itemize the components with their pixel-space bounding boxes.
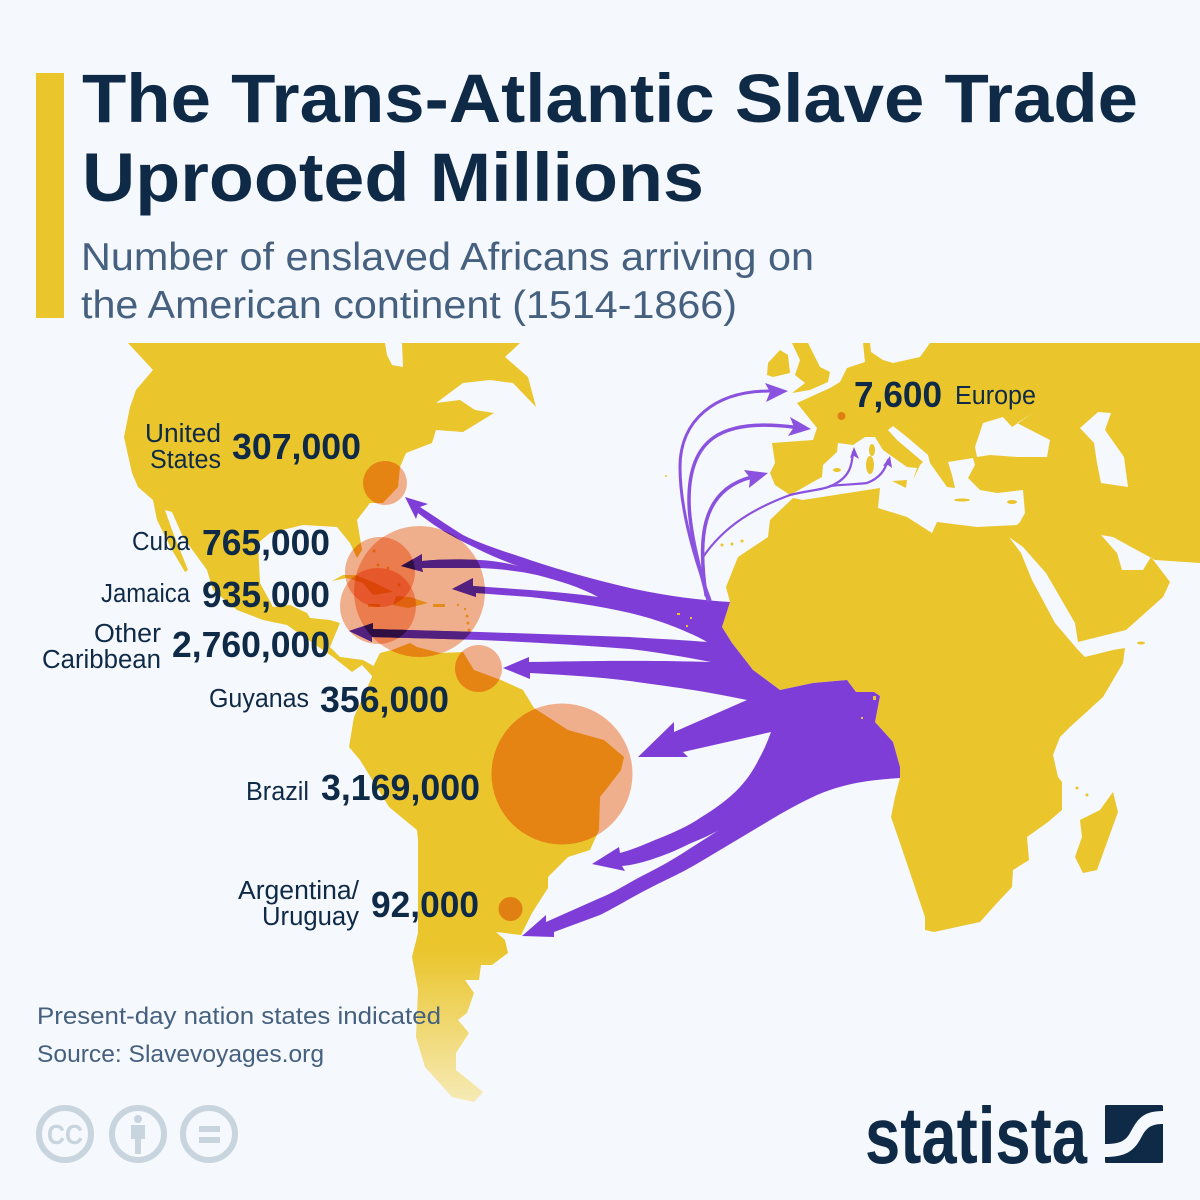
arrow: to Iberia [702,477,752,595]
arrow: to Mediterranean [703,452,853,557]
map: North and Central America [124,343,536,677]
label: Argentina/Uruguay: 92,000 [371,884,479,925]
label: Argentina/Uruguay [238,877,479,931]
icon: attribution [112,1108,164,1160]
label: Europe: Europe [955,382,1036,410]
title [82,60,1138,216]
map: South America [349,643,624,1102]
title accent bar [36,73,64,318]
bubble: Argentina/Uruguay [498,897,522,921]
arrow heads [744,383,892,488]
label: Guyanas: 356,000 [320,679,449,720]
label: Brazil: Brazil [246,778,309,806]
label: Europe [854,374,1036,415]
bubble: Other Caribbean [354,526,485,657]
icon: no derivatives [183,1108,235,1160]
specks of Cape Verde over the flow [677,613,876,719]
land tint under bubbles [353,468,624,835]
label: United States [145,420,361,474]
slave trade flow arrows [349,497,900,937]
label: Other Caribbean [42,620,330,674]
title: Uprooted Millions [82,139,704,216]
footer notes: Source: Slavevoyages.org [37,1041,324,1068]
label: Jamaica: Jamaica [101,580,191,608]
label: Cuba [132,522,330,563]
label: Brazil: 3,169,000 [321,767,480,808]
label: Europe: 7,600 [854,374,942,415]
subtitle: Number of enslaved Africans arriving on [81,236,814,279]
icon: cc: CC [47,1119,83,1150]
icon: statista mark [1105,1105,1163,1163]
map: islands [332,343,1145,873]
title: The Trans-Atlantic Slave Trade [82,60,1138,137]
footer notes [37,1003,441,1068]
bubble: United States [363,461,407,505]
icon: creative commons licence [39,1108,235,1160]
label: Argentina/Uruguay: Argentina/ [238,877,360,905]
icon: cc [39,1108,91,1160]
arrow tips seen through bubbles [349,530,485,642]
bubble: Europe [838,412,846,420]
bubbles [340,412,846,921]
label: Brazil [246,767,480,808]
data labels [42,374,1036,931]
bubble: Jamaica [340,568,416,644]
label: Jamaica [101,574,330,615]
bubble: Cuba [345,537,415,607]
world map [124,343,1200,1102]
statista logo: statista [865,1091,1087,1180]
label: United States: 307,000 [232,426,361,467]
label: Guyanas [209,679,449,720]
label: Guyanas: Guyanas [209,685,309,713]
label: Other Caribbean: 2,760,000 [172,624,330,665]
label: United States: States [150,446,221,474]
map: Africa, Europe and Asia [722,343,1200,932]
label: Jamaica: 935,000 [202,574,330,615]
bubble: Brazil [492,704,632,844]
arrow: to France [689,425,793,600]
footer notes: Present-day nation states indicated [37,1003,441,1030]
subtitle: the American continent (1514-1866) [81,284,737,327]
arrow: to Britain [680,391,770,600]
label: Cuba: 765,000 [202,522,330,563]
label: Other Caribbean: Caribbean [42,646,161,674]
bubble: Guyanas [455,645,502,692]
label: United States: United [145,420,221,448]
arrows to Europe [680,383,892,600]
subtitle [81,236,814,327]
arrow: to Italy [830,460,888,486]
label: Argentina/Uruguay: Uruguay [262,903,359,931]
label: Cuba: Cuba [132,528,191,556]
label: Other Caribbean: Other [94,620,162,648]
